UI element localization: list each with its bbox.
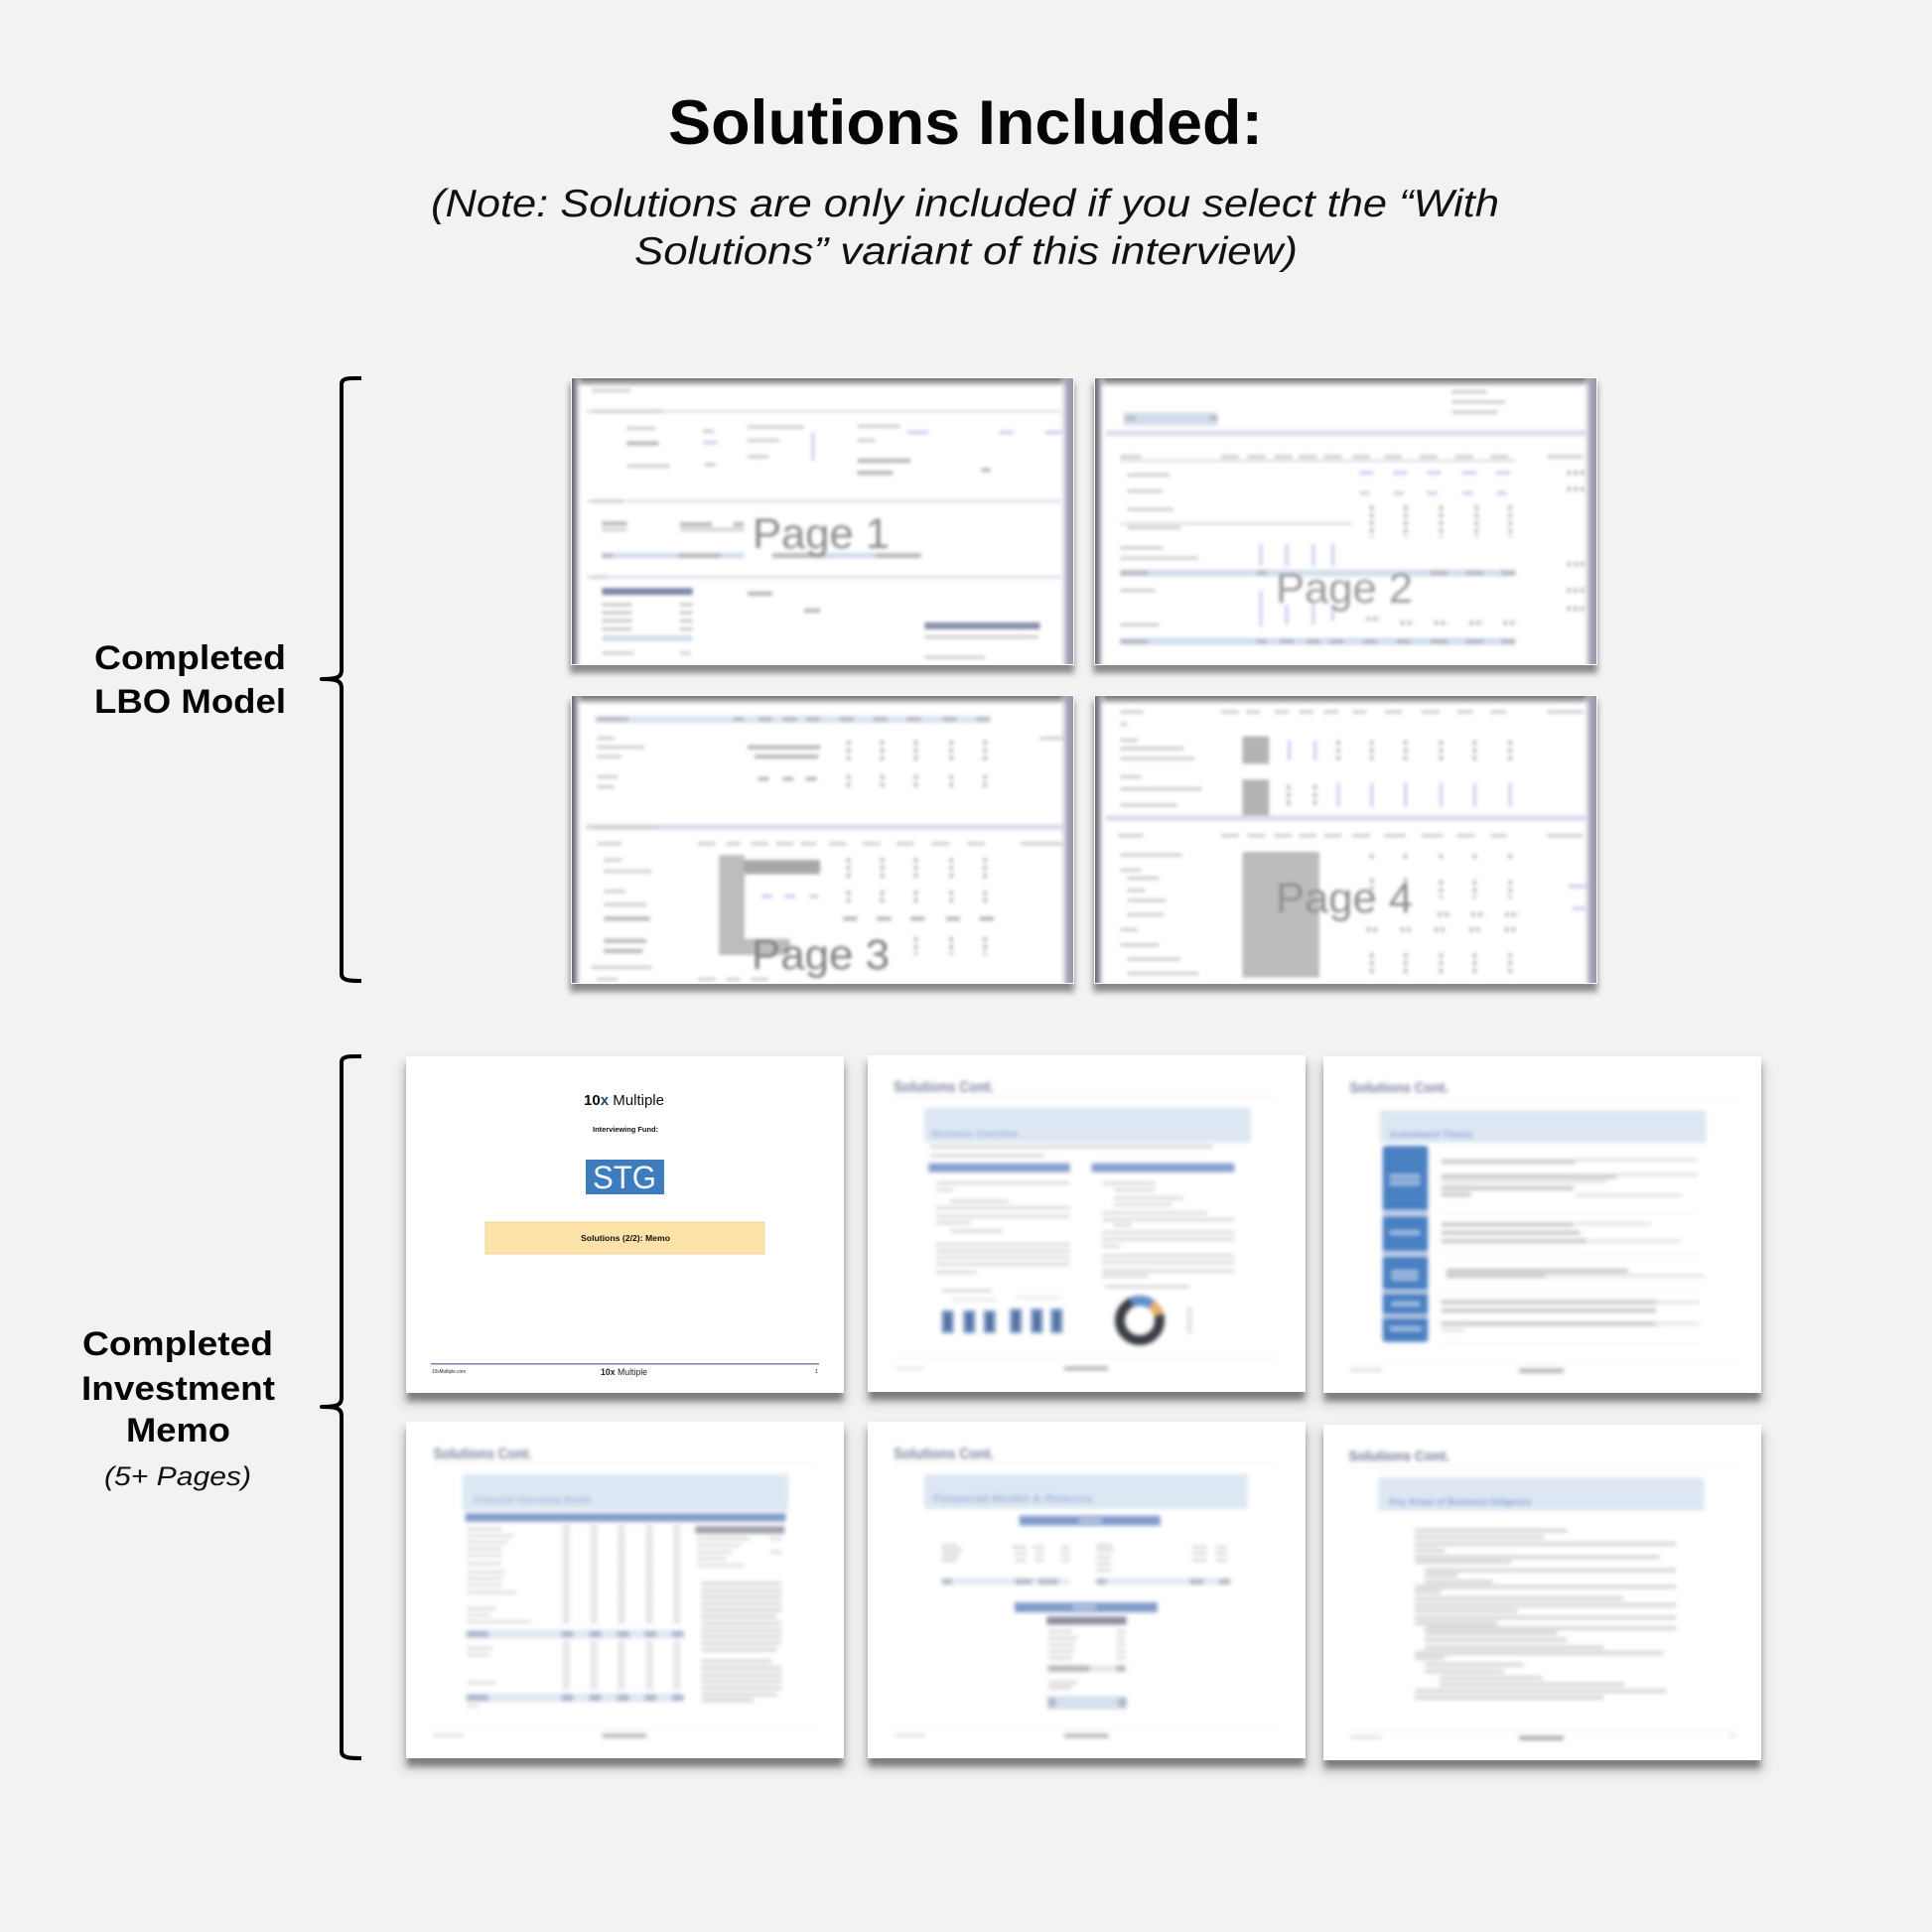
banner: Solutions memo bbox=[485, 1222, 764, 1254]
panel: memo business overview page: Solutions Cont. bbox=[894, 1078, 994, 1095]
panel: LBO model page 3 bbox=[566, 689, 1080, 992]
label: Completed Investment Memo: Investment bbox=[81, 1370, 275, 1408]
subtitle note: (Note: Solutions are only included if you select the “With bbox=[431, 183, 1499, 225]
panel: memo returns page: Solutions Cont. bbox=[894, 1445, 994, 1462]
panel: memo due diligence page: Solutions Cont. bbox=[1348, 1449, 1449, 1465]
logo: STG: STG bbox=[593, 1160, 656, 1195]
subtitle note bbox=[431, 183, 1499, 273]
panel: memo operating model page bbox=[403, 1422, 847, 1770]
panel: LBO model page 4 bbox=[1089, 689, 1603, 992]
panel: memo investment thesis page bbox=[1320, 1056, 1764, 1405]
panel: LBO model page 1: Page 1 bbox=[753, 510, 890, 558]
label: Completed LBO Model: Completed bbox=[94, 639, 286, 677]
label: Completed Investment Memo: Memo bbox=[126, 1412, 230, 1449]
bracket: investment memo bbox=[322, 1056, 361, 1758]
label: Completed Investment Memo: (5+ Pages) bbox=[104, 1461, 251, 1491]
panel: memo operating model page: Financial Operating Model bbox=[474, 1495, 591, 1506]
banner: Solutions memo: Solutions (2/2): Memo bbox=[581, 1233, 670, 1243]
text: Interviewing Fund: Interviewing Fund: bbox=[593, 1125, 658, 1134]
panel: LBO model page 3: Page 3 bbox=[752, 931, 890, 979]
panel: LBO model page 2: Page 2 bbox=[1276, 565, 1413, 613]
chart: donut bbox=[1120, 1301, 1160, 1340]
bracket: LBO model bbox=[322, 378, 361, 981]
panel: LBO model page 2 bbox=[1089, 371, 1603, 673]
panel: memo investment thesis page: Solutions Cont. bbox=[1349, 1080, 1449, 1097]
panel: LBO model page 4: Page 4 bbox=[1276, 875, 1413, 922]
footer: 1 bbox=[815, 1369, 818, 1375]
panel: memo cover page bbox=[403, 1056, 847, 1405]
panel: memo returns page bbox=[865, 1422, 1309, 1770]
label: Completed LBO Model: LBO Model bbox=[94, 683, 286, 721]
panel: memo returns page: Financial Model & Returns bbox=[933, 1491, 1093, 1505]
footer: 10x Multiple bbox=[601, 1367, 647, 1377]
panel: memo business overview page bbox=[865, 1055, 1309, 1404]
panel: memo investment thesis page: Investment Thesis bbox=[1390, 1130, 1473, 1141]
footer: 10xMultiple.com bbox=[432, 1369, 466, 1375]
title: Solutions Included: bbox=[668, 88, 1263, 158]
label: Completed Investment Memo bbox=[81, 1325, 275, 1491]
panel: memo operating model page: Solutions Cont. bbox=[433, 1445, 532, 1462]
panel: memo due diligence page: Key Areas of Business Diligence bbox=[1389, 1497, 1532, 1508]
label: Completed Investment Memo: Completed bbox=[82, 1325, 273, 1363]
panel: LBO model page 1 bbox=[566, 371, 1080, 673]
panel: memo due diligence page bbox=[1320, 1425, 1764, 1773]
label: Completed LBO Model bbox=[94, 639, 286, 721]
footer bbox=[431, 1363, 819, 1377]
logo: 10x Multiple: 10x Multiple bbox=[584, 1092, 664, 1109]
subtitle note: Solutions” variant of this interview) bbox=[634, 230, 1298, 273]
panel: memo business overview page: Business Overview bbox=[932, 1129, 1018, 1139]
